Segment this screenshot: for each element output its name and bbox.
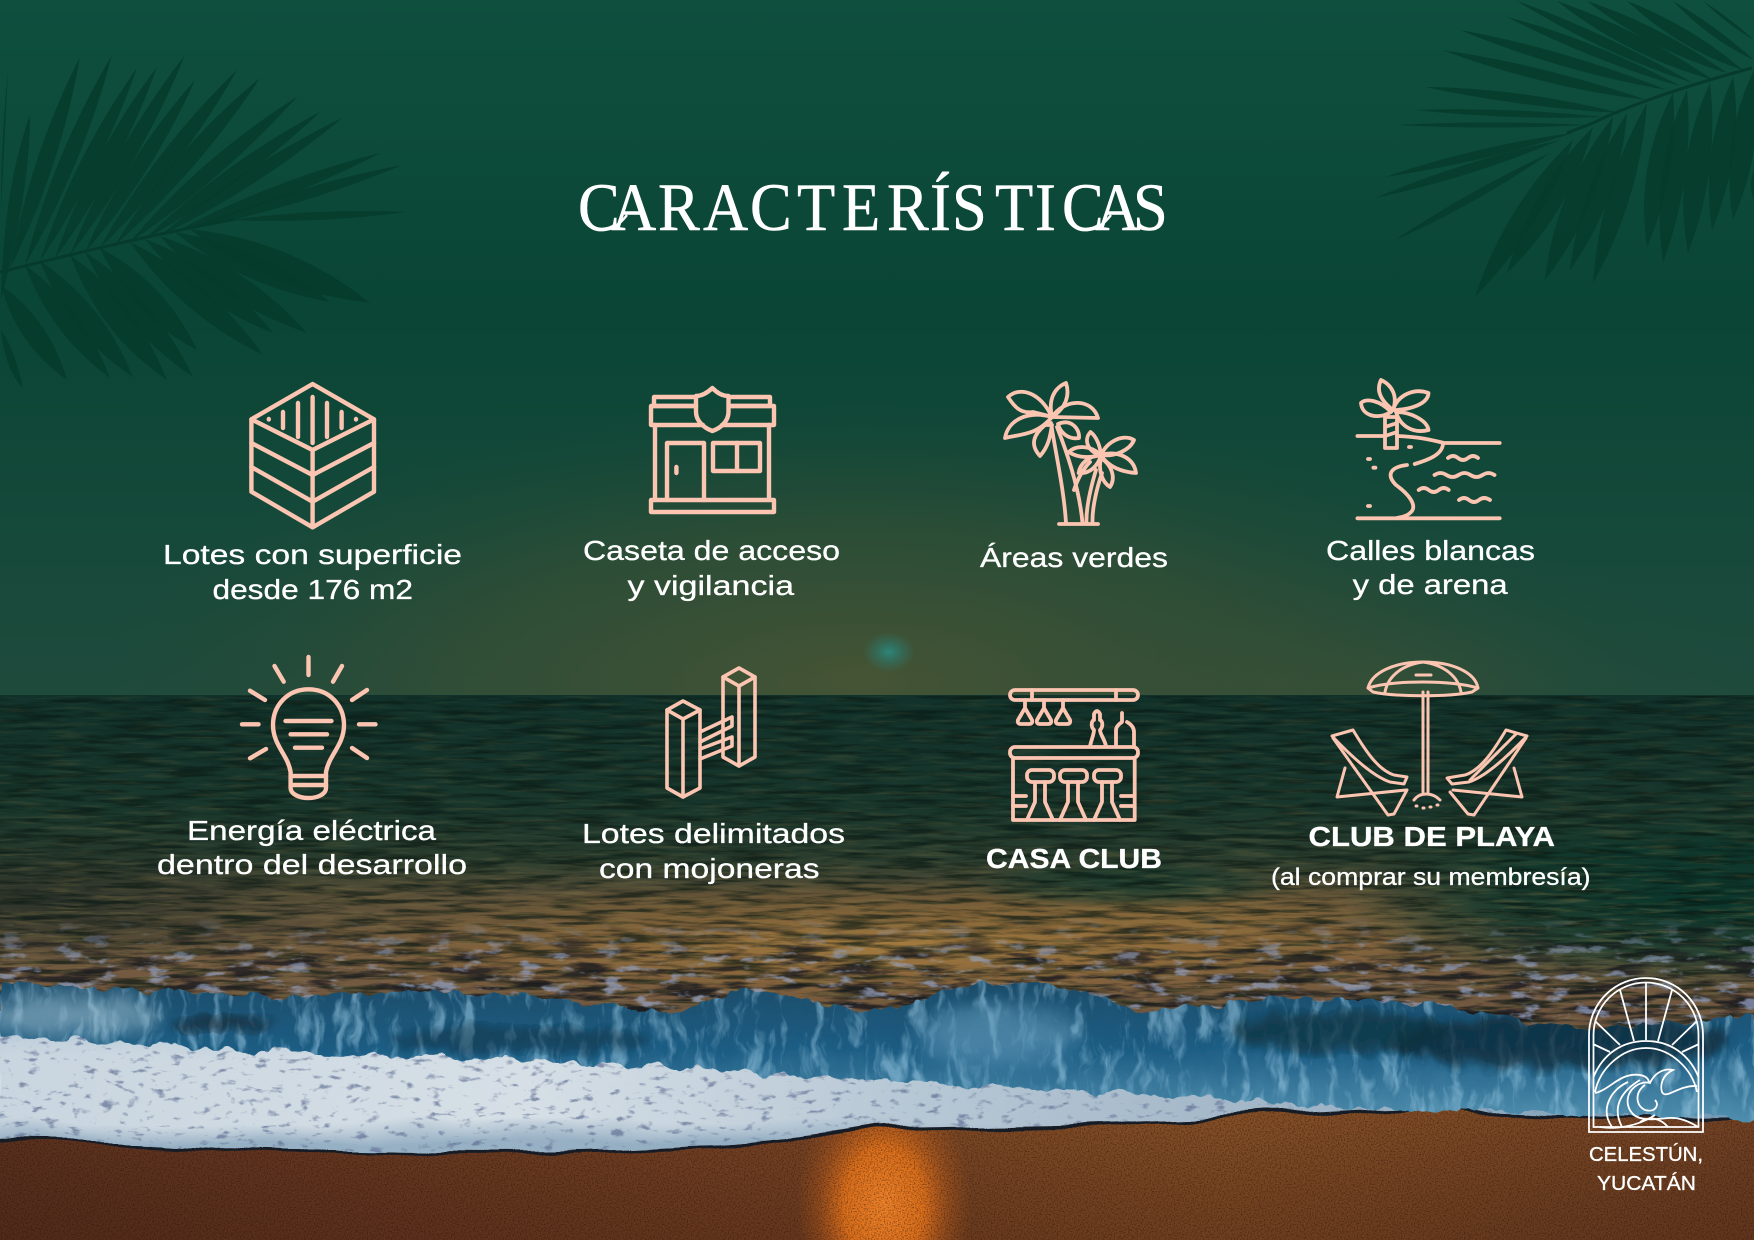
feature: energia electrica bbox=[157, 657, 467, 880]
label bbox=[157, 815, 467, 880]
label: Energía eléctrica bbox=[187, 815, 437, 846]
label: YUCATÁN bbox=[1597, 1172, 1696, 1195]
palm frond top right bbox=[1375, 1, 1754, 297]
icon: guard house with shield bbox=[651, 388, 774, 512]
label bbox=[1271, 821, 1590, 891]
label: CASA CLUB bbox=[986, 843, 1162, 874]
icon: beach road bbox=[1357, 380, 1500, 518]
label: Áreas verdes bbox=[980, 542, 1168, 573]
label: y vigilancia bbox=[628, 570, 795, 601]
icon: palm trees bbox=[1005, 383, 1136, 524]
label: Calles blancas bbox=[1326, 535, 1535, 566]
icon: umbrella and deck chairs bbox=[1332, 662, 1527, 815]
label bbox=[583, 535, 840, 601]
icon: arch with sun and wave bbox=[1589, 978, 1703, 1132]
feature: caseta de acceso bbox=[583, 388, 840, 601]
logo: Celestún, Yucatán bbox=[1589, 978, 1703, 1195]
feature: casa club bbox=[986, 690, 1162, 874]
label: con mojoneras bbox=[599, 853, 820, 884]
label bbox=[1589, 1143, 1703, 1195]
label: Lotes con superficie bbox=[163, 539, 462, 570]
label: Caseta de acceso bbox=[583, 535, 840, 566]
label: CELESTÚN, bbox=[1589, 1143, 1703, 1166]
label: (al comprar su membresía) bbox=[1271, 864, 1590, 891]
feature: lotes con superficie bbox=[163, 384, 462, 605]
label bbox=[1326, 535, 1535, 600]
feature: areas verdes bbox=[980, 383, 1168, 573]
icon: light bulb bbox=[242, 657, 376, 798]
icon: bar counter bbox=[1010, 690, 1138, 820]
label: desde 176 m2 bbox=[212, 574, 413, 605]
label bbox=[582, 818, 845, 884]
feature: club de playa bbox=[1271, 662, 1590, 891]
label: dentro del desarrollo bbox=[157, 849, 467, 880]
feature: lotes delimitados bbox=[582, 668, 845, 884]
label: Lotes delimitados bbox=[582, 818, 845, 849]
label bbox=[163, 539, 462, 605]
icon: land lot cube bbox=[251, 384, 374, 527]
palm frond top left bbox=[0, 55, 407, 388]
label: CLUB DE PLAYA bbox=[1308, 821, 1555, 852]
icon: boundary posts bbox=[667, 668, 755, 797]
title: CARACTERÍSTICAS bbox=[578, 171, 1168, 246]
feature: calles blancas bbox=[1326, 380, 1535, 600]
label: y de arena bbox=[1353, 569, 1508, 600]
